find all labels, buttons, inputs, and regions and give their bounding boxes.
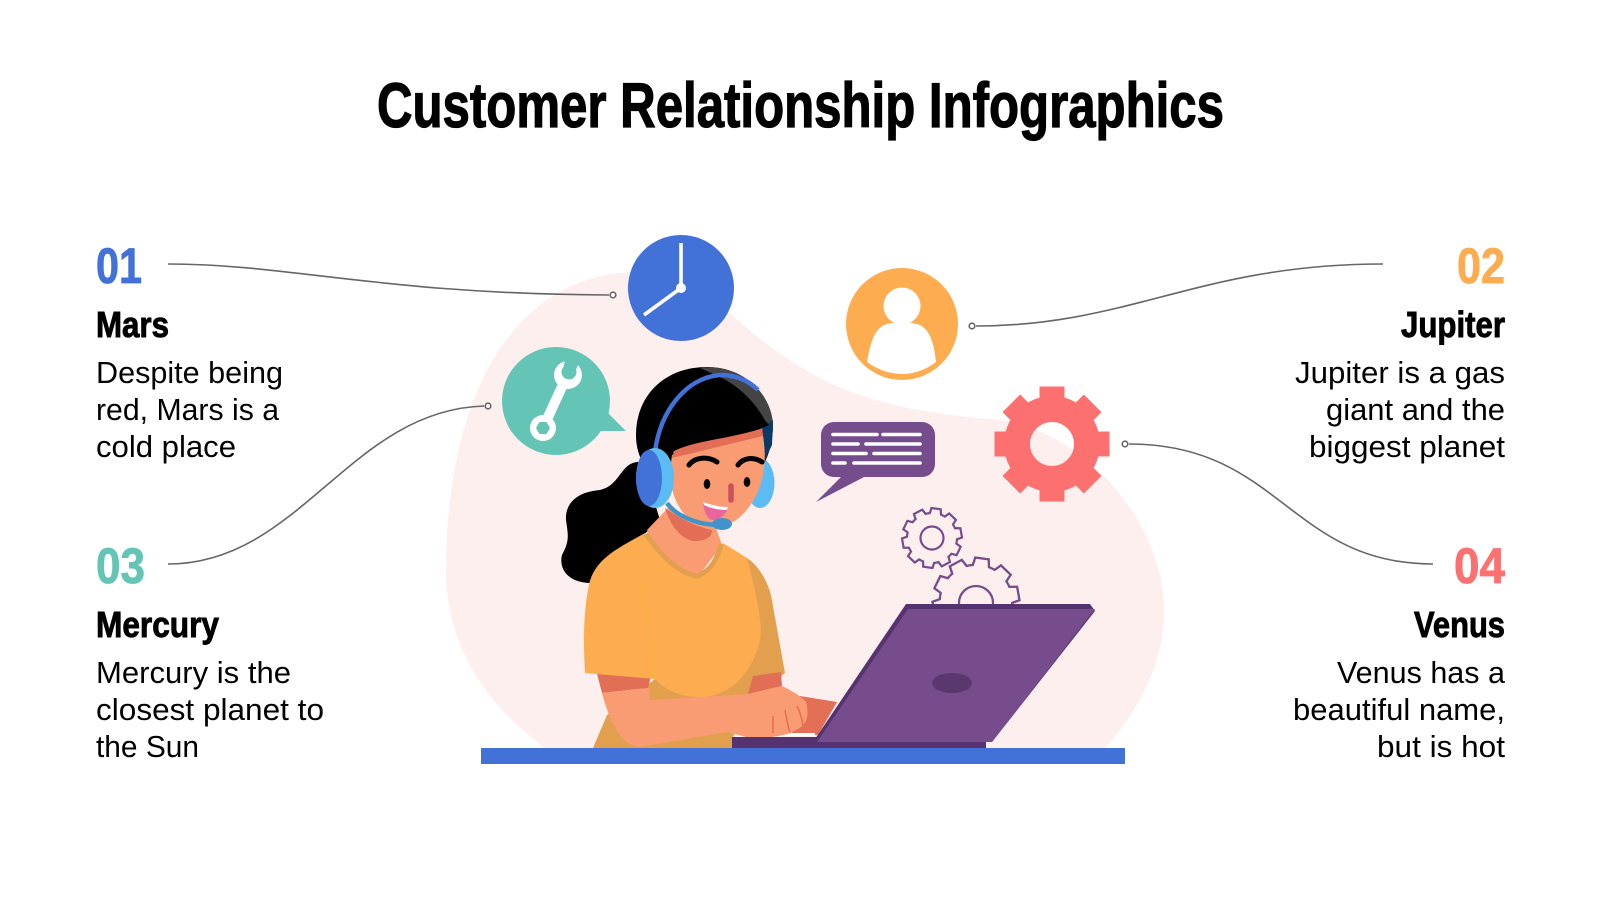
nose xyxy=(728,486,734,500)
laptop xyxy=(732,604,1095,748)
connector 02 to person xyxy=(969,264,1383,329)
number 01: 01 xyxy=(96,238,142,294)
connector 03 to wrench xyxy=(168,403,491,564)
text block Mercury: the Sun xyxy=(96,730,199,764)
heading Mercury: Mercury xyxy=(96,604,219,645)
keyboard strip xyxy=(750,730,815,736)
text block Venus: but is hot xyxy=(1377,730,1506,764)
near arm xyxy=(602,686,808,747)
panel: 04 Venus xyxy=(1293,538,1506,764)
torso shadow xyxy=(593,558,785,748)
mic xyxy=(712,518,732,530)
far hand xyxy=(760,696,837,735)
text block Venus: Venus has a xyxy=(1337,656,1505,690)
mic boom xyxy=(667,503,716,525)
laptop lid face xyxy=(817,609,1095,742)
near earcup xyxy=(636,448,674,508)
finger lines xyxy=(773,706,803,733)
near earcup inner xyxy=(636,450,662,506)
text block Mars: red, Mars is a xyxy=(96,393,279,427)
icon: wrench speech bubble xyxy=(502,347,626,455)
shirt xyxy=(584,533,761,697)
laptop logo xyxy=(932,673,972,693)
icon: cog xyxy=(994,386,1110,502)
icon: small outline gear xyxy=(898,504,966,572)
neck shadow xyxy=(665,508,712,541)
number 03: 03 xyxy=(96,538,145,594)
number 04: 04 xyxy=(1454,538,1505,594)
heading Mars: Mars xyxy=(96,304,169,345)
laptop base xyxy=(732,737,986,748)
connector 01 to clock xyxy=(168,264,616,298)
eyebrows xyxy=(689,458,762,465)
panel: 02 Jupiter xyxy=(1295,238,1506,464)
laptop lid shell xyxy=(813,604,1095,742)
text block Mercury xyxy=(96,656,324,764)
title: Customer Relationship Infographics xyxy=(377,71,1224,141)
forehead shadow xyxy=(672,427,763,458)
text block Mars: cold place xyxy=(96,430,236,464)
background blob xyxy=(446,272,1164,748)
eyes xyxy=(704,479,710,489)
hair highlight xyxy=(700,367,773,432)
text block Mars xyxy=(96,356,283,464)
headband xyxy=(655,375,758,452)
text block Jupiter: giant and the xyxy=(1326,393,1505,427)
collar xyxy=(646,534,721,576)
panel: 01 Mars xyxy=(96,238,283,464)
icon: chat bubble xyxy=(816,422,935,502)
panel: 03 Mercury xyxy=(96,538,324,764)
text block Jupiter: Jupiter is a gas xyxy=(1295,356,1505,390)
text block Mercury: Mercury is the xyxy=(96,656,291,690)
text block Jupiter: biggest planet xyxy=(1309,430,1506,464)
desk xyxy=(481,748,1125,764)
number 02: 02 xyxy=(1457,238,1505,294)
text block Jupiter xyxy=(1295,356,1506,464)
text block Venus xyxy=(1293,656,1506,764)
teeth xyxy=(703,502,728,510)
far earcup xyxy=(746,458,774,508)
ponytail xyxy=(561,462,660,583)
front hair xyxy=(652,378,769,465)
connector 04 to gear xyxy=(1122,441,1433,564)
text block Mercury: closest planet to xyxy=(96,693,324,727)
mouth xyxy=(703,503,728,520)
icon: large outline gear xyxy=(926,552,1026,650)
icon: clock xyxy=(628,235,734,341)
heading Venus: Venus xyxy=(1414,604,1505,645)
heading Jupiter: Jupiter xyxy=(1401,304,1505,345)
text block Mars: Despite being xyxy=(96,356,283,390)
hair far side shade xyxy=(762,420,773,466)
neck xyxy=(647,508,722,578)
sleeve seam xyxy=(643,583,655,679)
sleeve cuffs xyxy=(596,670,782,694)
illustration: woman with headset xyxy=(561,367,837,748)
icon: person xyxy=(846,268,958,380)
text block Venus: beautiful name, xyxy=(1293,693,1505,727)
face xyxy=(671,430,765,527)
back hair xyxy=(636,367,773,480)
